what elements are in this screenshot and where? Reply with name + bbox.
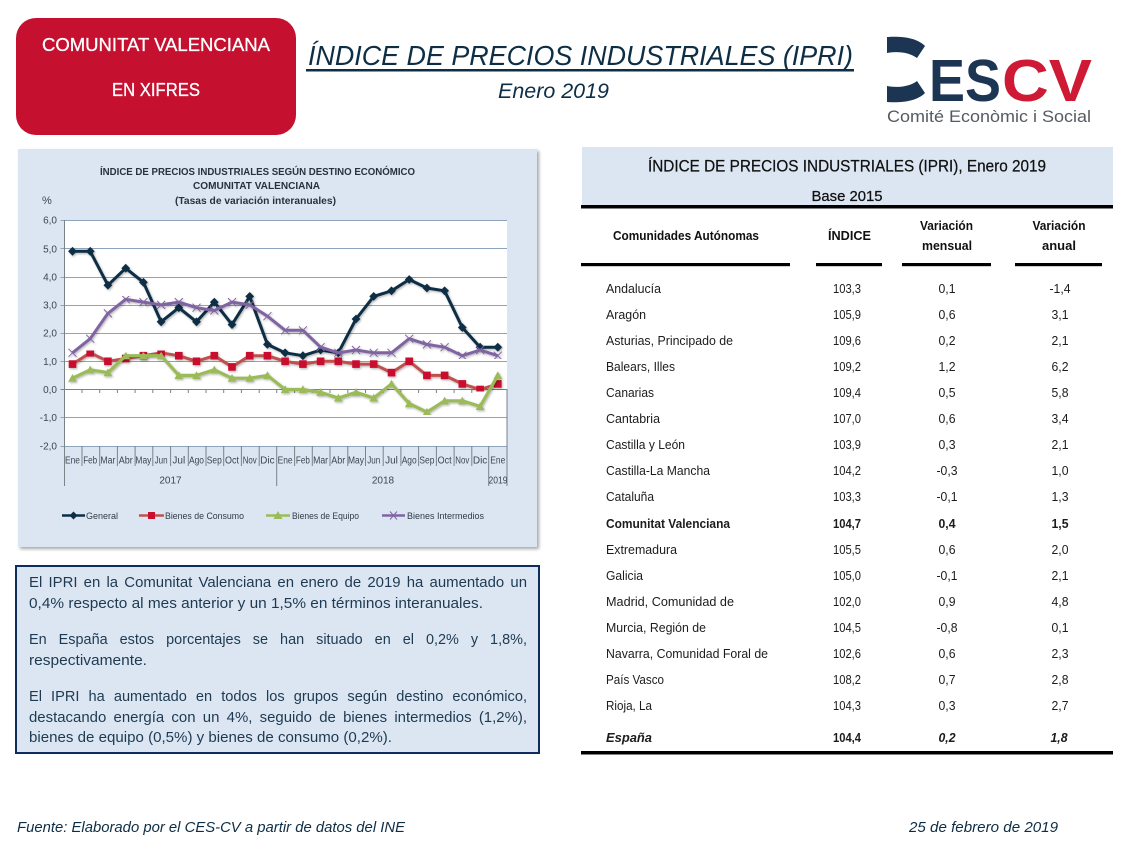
x axis years: 2017 [159, 476, 182, 486]
legend: Bienes Intermedios [407, 511, 484, 522]
table column headers: Comunidades Autónomas [613, 228, 759, 243]
row: Galicia: 105,0 [833, 569, 861, 583]
table title [581, 147, 1113, 208]
x axis months: Sep [419, 456, 435, 466]
x axis months: Ago [189, 456, 204, 466]
x axis months: Feb [296, 456, 310, 466]
row: Madrid: 102,0 [833, 595, 861, 609]
x axis months: Oct [438, 456, 452, 466]
subtitle: Enero 2019 [498, 80, 609, 103]
x axis months: Oct [225, 456, 239, 466]
row: Andalucía [606, 281, 1071, 296]
row: Murcia: 0,1 [1052, 621, 1069, 635]
y axis labels: -1,0 [40, 413, 57, 424]
row: Navarra: 102,6 [833, 647, 861, 661]
table column headers: mensual [922, 238, 972, 253]
row: Castilla y León [606, 437, 1069, 452]
row: Balears: Balears, Illes [606, 359, 675, 374]
date: 25 de febrero de 2019 [908, 820, 1058, 836]
row: Navarra: Navarra, Comunidad Foral de [606, 646, 768, 661]
row: Cataluña: Cataluña [606, 489, 655, 504]
row: Andalucía: Andalucía [606, 281, 662, 296]
source note: Fuente: Elaborado por el CES-CV a partir de datos del INE [17, 820, 405, 836]
row: Castilla-La Mancha: 1,0 [1052, 464, 1069, 478]
x axis months: Dic [260, 456, 275, 466]
x axis months: Jul [172, 456, 185, 466]
chart title [100, 165, 415, 207]
row: Castilla-La Mancha: 104,2 [833, 464, 861, 478]
x axis months: Dic [473, 456, 487, 466]
row: Cataluña [606, 489, 1069, 504]
row: Canarias: 109,4 [833, 386, 861, 400]
panel: data table [581, 147, 1113, 754]
paragraph 3: destacando energía con un 4%, seguido de bienes intermedios (1,2%), [29, 710, 527, 726]
y axis unit: % [42, 195, 52, 207]
row: Cantabria: 107,0 [833, 412, 861, 426]
row: Murcia: Murcia, Región de [606, 620, 706, 635]
table title: Base 2015 [812, 189, 882, 205]
plot area [64, 220, 507, 446]
row: Comunitat Valenciana: 0,4 [938, 517, 956, 531]
panel: text summary [16, 566, 539, 753]
row: Cantabria: 0,6 [938, 412, 956, 426]
row: Balears: 6,2 [1052, 360, 1069, 374]
row: Aragón [606, 307, 1069, 322]
row: Rioja: 104,3 [833, 699, 861, 713]
row: Aragón: Aragón [606, 307, 646, 322]
row: Castilla y León: 2,1 [1052, 438, 1069, 452]
paragraph 2 [29, 632, 527, 669]
x axis years [159, 476, 508, 486]
y axis labels: 2,0 [43, 328, 57, 340]
row: Asturias [606, 333, 1069, 348]
row: Castilla y León: 0,3 [938, 438, 956, 452]
row: España total: 0,2 [938, 731, 956, 745]
y axis labels: 5,0 [43, 244, 57, 256]
x axis months: Jun [367, 456, 380, 466]
row: Madrid: Madrid, Comunidad de [606, 594, 734, 609]
row: Asturias: Asturias, Principado de [606, 333, 733, 348]
row: Navarra: 0,6 [938, 647, 956, 661]
row: Comunitat Valenciana: 1,5 [1052, 517, 1069, 531]
row: Castilla-La Mancha: -0,3 [936, 464, 958, 478]
table column headers: ÍNDICE [828, 228, 871, 243]
row: Balears: 1,2 [938, 360, 956, 374]
logo: CESCV [887, 37, 1092, 126]
row: Cataluña: -0,1 [936, 490, 958, 504]
table column headers: Variación [1032, 218, 1086, 233]
x axis months: Ene [65, 456, 80, 466]
y axis labels: 0,0 [43, 385, 57, 396]
row: España total: 1,8 [1050, 731, 1068, 745]
row: Balears: 109,2 [833, 360, 861, 374]
row: Murcia: -0,8 [936, 621, 958, 635]
x axis months: Sep [207, 456, 222, 466]
row: Galicia: -0,1 [936, 569, 958, 583]
table column headers: Variación [920, 218, 973, 233]
row: España total [606, 730, 1068, 745]
row: España total: 104,4 [833, 731, 861, 745]
row: Asturias: 109,6 [833, 334, 861, 348]
row: Comunitat Valenciana: 104,7 [833, 517, 861, 531]
row: Canarias: 0,5 [938, 386, 956, 400]
row: Asturias: 2,1 [1052, 334, 1069, 348]
row: Canarias [606, 385, 1069, 400]
row: País Vasco: 2,8 [1052, 673, 1069, 687]
row: Aragón: 105,9 [833, 308, 861, 322]
table column headers [581, 218, 1102, 266]
row: Extremadura: Extremadura [606, 542, 678, 557]
table title: ÍNDICE DE PRECIOS INDUSTRIALES (IPRI), Enero 2019 [648, 156, 1046, 176]
x axis months: Jul [385, 456, 398, 466]
row: Cantabria [606, 411, 1069, 426]
paragraph 1 [29, 575, 527, 612]
panel: chart [18, 149, 537, 547]
x axis months: Abr [119, 456, 133, 466]
row: Rioja: 2,7 [1052, 699, 1069, 713]
row: País Vasco: País Vasco [606, 672, 664, 687]
row: Madrid [606, 594, 1069, 609]
row: Galicia [606, 568, 1069, 583]
logo: CESCV: ES [929, 48, 1001, 114]
logo: CESCV: CV [1002, 48, 1092, 114]
row: Andalucía: 0,1 [938, 282, 956, 296]
x axis months: Feb [83, 456, 98, 466]
row: Galicia: 2,1 [1052, 569, 1069, 583]
row: Navarra: 2,3 [1052, 647, 1069, 661]
row: Extremadura: 105,5 [833, 543, 861, 557]
row: Aragón: 0,6 [938, 308, 956, 322]
series: Bienes Intermedios [72, 299, 498, 356]
row: Extremadura [606, 542, 1069, 557]
paragraph 3 [29, 689, 527, 746]
row: Madrid: 0,9 [938, 595, 956, 609]
row: Cantabria: 3,4 [1052, 412, 1069, 426]
chart title: ÍNDICE DE PRECIOS INDUSTRIALES SEGÚN DESTINO ECONÓMICO [100, 165, 415, 178]
title: ÍNDICE DE PRECIOS INDUSTRIALES (IPRI) [308, 40, 853, 71]
row: País Vasco: 0,7 [938, 673, 956, 687]
row: Cantabria: Cantabria [606, 411, 661, 426]
x axis months [65, 456, 506, 466]
row: Aragón: 3,1 [1052, 308, 1069, 322]
x axis months: Ene [278, 456, 293, 466]
x axis years: 2018 [372, 476, 395, 486]
table column headers: anual [1042, 238, 1076, 253]
row: Rioja: Rioja, La [606, 698, 653, 713]
row: España total: España [606, 730, 652, 745]
row: Rioja: 0,3 [938, 699, 956, 713]
paragraph 1: 0,4% respecto al mes anterior y un 1,5% en términos interanuales. [29, 596, 483, 612]
paragraph 2: respectivamente. [29, 653, 147, 669]
paragraph 2: En España estos porcentajes se han situado en el 0,2% y 1,8%, [29, 632, 527, 648]
row: Canarias: Canarias [606, 385, 654, 400]
row: Castilla y León: Castilla y León [606, 437, 685, 452]
x axis months: Jun [155, 456, 168, 466]
row: Rioja [606, 698, 1069, 713]
panel: red badge [16, 18, 296, 135]
y axis labels: -2,0 [40, 442, 57, 452]
row: Andalucía: -1,4 [1050, 282, 1071, 296]
row: Navarra [606, 646, 1069, 661]
series: Bienes de Equipo [72, 356, 498, 412]
paragraph 3: bienes de equipo (0,5%) y bienes de consumo (0,2%). [29, 730, 392, 746]
legend: General [86, 511, 118, 522]
row: Cataluña: 103,3 [833, 490, 861, 504]
row: Canarias: 5,8 [1052, 386, 1069, 400]
chart title: (Tasas de variación interanuales) [175, 196, 336, 207]
row: Galicia: Galicia [606, 568, 644, 583]
x axis months: Abr [331, 456, 346, 466]
row: Murcia: 104,5 [833, 621, 861, 635]
logo: CESCV: Comité Econòmic i Social [887, 107, 1091, 126]
y axis labels: 4,0 [43, 272, 57, 284]
x axis months: Ago [402, 456, 417, 466]
paragraph 3: El IPRI ha aumentado en todos los grupos según destino económico, [29, 689, 527, 705]
series: Bienes de Consumo [72, 353, 498, 390]
row: Castilla-La Mancha: Castilla-La Mancha [606, 463, 711, 478]
x axis months: Ene [490, 456, 506, 466]
paragraph 1: El IPRI en la Comunitat Valenciana en enero de 2019 ha aumentado un [29, 575, 527, 591]
x axis months: May [348, 456, 364, 466]
row: Extremadura: 0,6 [938, 543, 956, 557]
row: Castilla-La Mancha [606, 463, 1069, 478]
y axis labels: 6,0 [43, 216, 57, 226]
row: Castilla y León: 103,9 [833, 438, 861, 452]
series: General [72, 251, 498, 356]
row: Comunitat Valenciana: Comunitat Valenciana [606, 516, 731, 531]
x axis months: May [135, 456, 151, 466]
row: Balears [606, 359, 1069, 374]
y axis labels: 3,0 [43, 300, 57, 312]
y axis labels: 1,0 [43, 357, 57, 368]
row: Comunitat Valenciana [606, 516, 1069, 531]
row: Extremadura: 2,0 [1052, 543, 1069, 557]
legend [62, 511, 484, 522]
x axis months: Nov [243, 456, 257, 466]
axes and ticks [60, 220, 507, 486]
x axis years: 2019 [488, 476, 508, 486]
row: Madrid: 4,8 [1052, 595, 1069, 609]
row: País Vasco: 108,2 [833, 673, 861, 687]
chart title: COMUNITAT VALENCIANA [193, 181, 320, 192]
panel: red badge: EN XIFRES [112, 80, 200, 100]
legend: Bienes de Consumo [165, 511, 244, 522]
panel: red badge: COMUNITAT VALENCIANA [42, 35, 270, 55]
row: Andalucía: 103,3 [833, 282, 861, 296]
row: Asturias: 0,2 [938, 334, 956, 348]
x axis months: Mar [100, 456, 116, 466]
legend: Bienes de Equipo [292, 511, 359, 522]
x axis months: Nov [455, 456, 469, 466]
x axis months: Mar [313, 456, 329, 466]
row: País Vasco [606, 672, 1069, 687]
row: Cataluña: 1,3 [1052, 490, 1069, 504]
y axis labels [40, 216, 57, 452]
row: Murcia [606, 620, 1069, 635]
